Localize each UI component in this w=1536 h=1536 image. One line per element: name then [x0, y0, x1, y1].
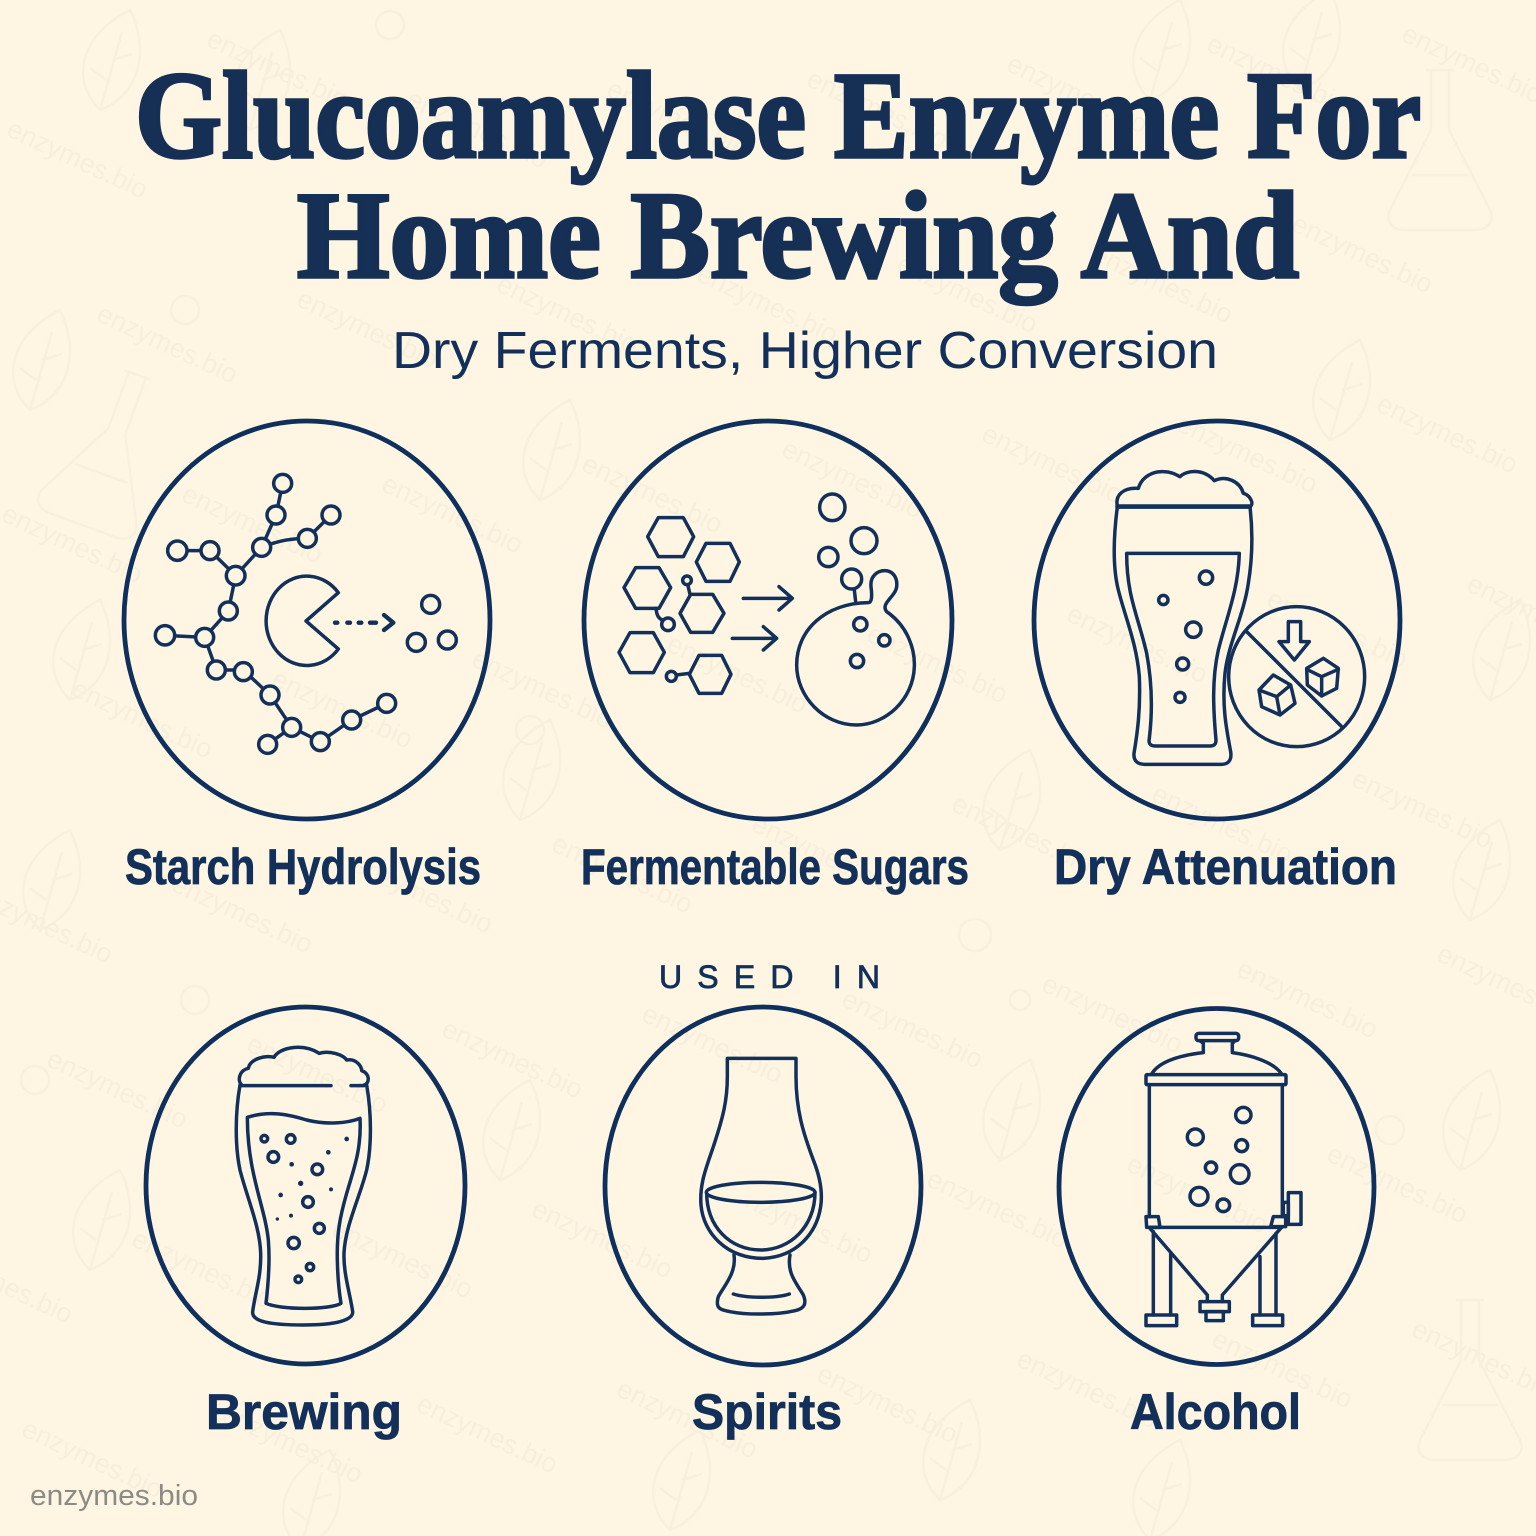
badge: [1229, 607, 1365, 747]
watermark text: enzymes.bio: [217, 1398, 368, 1489]
watermark text: enzymes.bio: [1062, 598, 1213, 689]
icon: starch chain with enzyme: [155, 474, 456, 753]
watermark text: enzymes.bio: [802, 63, 953, 154]
label: Dry Attenuation: [1054, 839, 1397, 895]
watermark text: enzymes.bio: [1287, 208, 1438, 299]
dotted arrow: [335, 615, 393, 630]
enzyme pac-man: [266, 576, 338, 665]
label: Brewing: [206, 1384, 402, 1440]
title: Glucoamylase Enzyme For: [135, 47, 1421, 184]
watermark text: enzymes.bio: [922, 1163, 1073, 1254]
watermark text: enzymes.bio: [202, 23, 353, 114]
watermark text: enzymes.bio: [327, 1213, 478, 1304]
watermark text: enzymes.bio: [347, 848, 498, 939]
watermark text: enzymes.bio: [242, 1028, 393, 1119]
watermark text: enzymes.bio: [1037, 968, 1188, 1059]
watermark text: enzymes.bio: [17, 1413, 168, 1504]
icon: beer glass with no-sugar badge: [1114, 472, 1365, 764]
watermark text: enzymes.bio: [377, 468, 528, 559]
watermark text: enzymes.bio: [1087, 238, 1238, 329]
section label: used in: USED IN: [659, 959, 880, 995]
watermark text: enzymes.bio: [527, 1193, 678, 1284]
watermark text: enzymes.bio: [547, 828, 698, 919]
watermark text: enzymes.bio: [2, 113, 153, 204]
panel: fermentable sugars: [581, 421, 969, 895]
circle outline: [605, 1007, 921, 1365]
watermark text: enzymes.bio: [637, 998, 788, 1089]
watermark text: enzymes.bio: [267, 663, 418, 754]
watermark text: enzymes.bio: [602, 73, 753, 164]
circle outline: [124, 421, 490, 819]
watermark text: enzymes.bio: [1122, 1148, 1273, 1239]
watermark text: enzymes.bio: [92, 298, 243, 389]
watermark text: enzymes.bio: [812, 1358, 963, 1449]
panel: starch hydrolysis: [124, 421, 490, 895]
watermark text: enzymes.bio: [402, 83, 553, 174]
icon: sugars to yeast: [619, 494, 914, 725]
watermark text: enzymes.bio: [1147, 778, 1298, 869]
panel: spirits: [605, 1007, 921, 1440]
watermark text: enzymes.bio: [1347, 763, 1498, 854]
watermark text: enzymes.bio: [467, 643, 618, 734]
watermark text: enzymes.bio: [492, 268, 643, 359]
label: Fermentable Sugars: [581, 839, 969, 895]
watermark text: enzymes.bio: [292, 283, 443, 374]
watermark text: enzymes.bio: [1207, 1323, 1358, 1414]
title: [135, 47, 1421, 305]
watermark text: enzymes.bio: [862, 618, 1013, 709]
watermark text: enzymes.bio: [662, 628, 813, 719]
footer credit: enzymes.bio: [30, 1480, 198, 1512]
yeast cell: [797, 571, 914, 725]
watermark text: enzymes.bio: [947, 788, 1098, 879]
subtitle: Dry Ferments, Higher Conversion: [392, 322, 1218, 380]
label: Spirits: [692, 1384, 842, 1440]
watermark text: enzymes.bio: [437, 1013, 588, 1104]
watermark text: enzymes.bio: [1322, 1138, 1473, 1229]
label: Starch Hydrolysis: [125, 839, 481, 895]
circle outline: [584, 421, 952, 819]
watermark text: enzymes.bio: [1012, 1343, 1163, 1434]
icon: whisky glass: [701, 1058, 821, 1314]
watermark text: enzymes.bio: [1262, 583, 1413, 674]
panel: brewing: [146, 1007, 465, 1440]
watermark text: enzymes.bio: [412, 1388, 563, 1479]
watermark text: enzymes.bio: [127, 1223, 278, 1314]
watermark text: enzymes.bio: [727, 1178, 878, 1269]
icon: beer glass: [236, 1047, 370, 1325]
watermark text: enzymes.bio: [67, 673, 218, 764]
watermark text: enzymes.bio: [1202, 28, 1353, 119]
watermark text: enzymes.bio: [177, 478, 328, 569]
watermark text: enzymes.bio: [167, 868, 318, 959]
watermark text: enzymes.bio: [892, 248, 1043, 339]
circle outline: [1059, 1008, 1374, 1364]
panel: alcohol: [1059, 1008, 1374, 1440]
watermark text: enzymes.bio: [1002, 48, 1153, 139]
arrows: [732, 587, 792, 650]
watermark text: enzymes.bio: [1372, 388, 1523, 479]
watermark text: enzymes.bio: [1232, 953, 1383, 1044]
panel: dry attenuation: [1034, 421, 1400, 895]
title: Home Brewing And: [297, 167, 1299, 305]
watermark text: enzymes.bio: [977, 418, 1128, 509]
circle outline: [146, 1007, 465, 1364]
watermark text: enzymes.bio: [692, 258, 843, 349]
watermark text: enzymes.bio: [747, 808, 898, 899]
watermark text: enzymes.bio: [1172, 408, 1323, 499]
watermark text: enzymes.bio: [612, 1373, 763, 1464]
label: Alcohol: [1130, 1384, 1301, 1440]
glucose units: [407, 595, 456, 651]
bubbles: [819, 494, 890, 668]
watermark text: enzymes.bio: [777, 433, 928, 524]
watermark text: enzymes.bio: [837, 983, 988, 1074]
watermark text: enzymes.bio: [577, 448, 728, 539]
icon: fermenter tank: [1146, 1033, 1301, 1326]
watermark text: enzymes.bio: [42, 1043, 193, 1134]
watermark text: enzymes.bio: [0, 498, 148, 589]
circle outline: [1034, 421, 1400, 819]
